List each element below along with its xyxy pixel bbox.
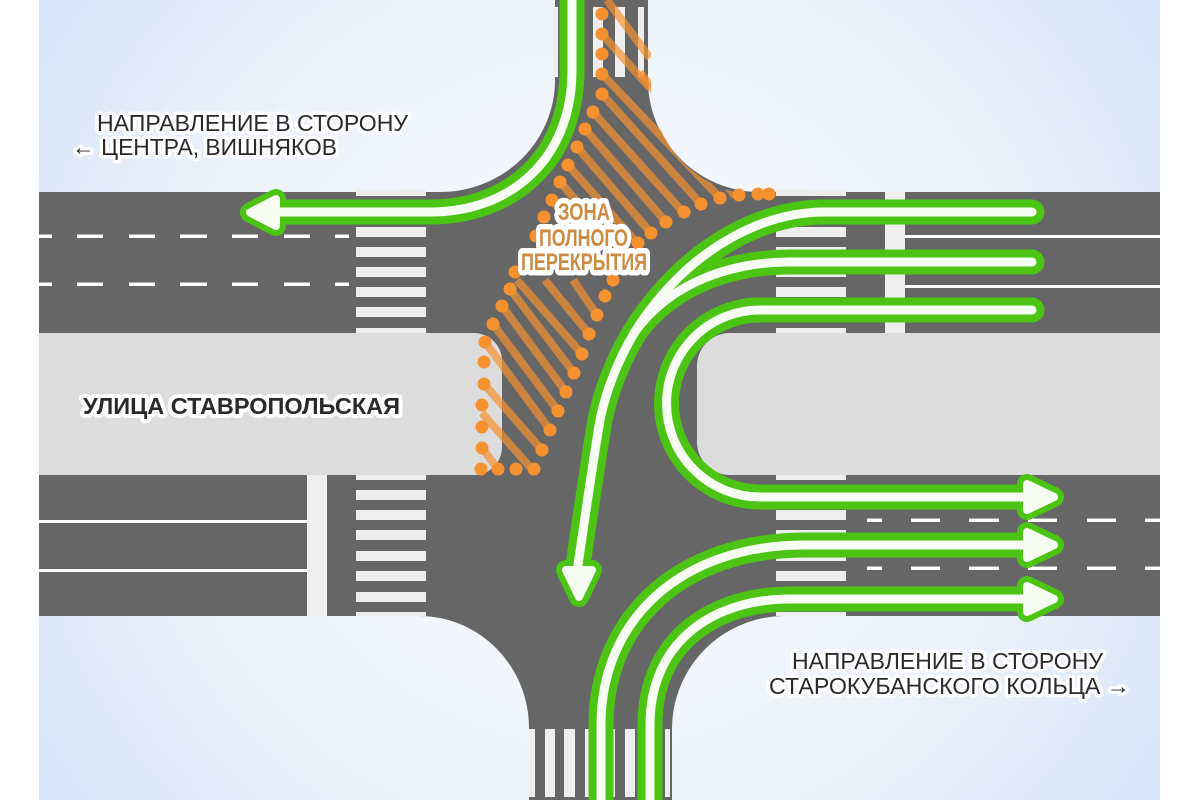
dashed lines: west bbox=[39, 234, 349, 286]
crosswalk: south bbox=[529, 729, 670, 797]
traffic routes bbox=[250, 0, 1054, 800]
label: direction to Starokubanskoe ring: СТАРОКУБАНСКОГО КОЛЬЦА → bbox=[769, 673, 1130, 699]
label: direction to centre: НАПРАВЛЕНИЕ В СТОРОНУ bbox=[97, 110, 408, 136]
dashed lines: east bbox=[867, 518, 1160, 570]
label: direction to centre bbox=[72, 110, 408, 160]
route outlines bbox=[275, 0, 1032, 800]
lane lines bbox=[39, 235, 1160, 572]
crosswalk: east bottom bbox=[776, 475, 846, 616]
median: left bbox=[39, 333, 502, 475]
full closure zone: hatching and dotted border bbox=[474, 0, 776, 476]
hatching: upper section bbox=[552, 0, 735, 245]
crosswalk: east top bbox=[776, 190, 846, 333]
crosswalk: west top bbox=[356, 190, 426, 333]
label: direction to centre: ← ЦЕНТРА, ВИШНЯКОВ bbox=[72, 134, 337, 160]
crosswalk: north bbox=[553, 7, 644, 77]
label: direction to Starokubanskoe ring: НАПРАВЛЕНИЕ В СТОРОНУ bbox=[792, 648, 1103, 674]
stop lines bbox=[307, 192, 905, 616]
label: full closure zone: ПЕРЕКРЫТИЯ bbox=[521, 249, 647, 276]
route centre lines bbox=[275, 0, 1032, 800]
arrow heads outlines bbox=[250, 199, 1054, 612]
label: full closure zone: ПОЛНОГО bbox=[539, 225, 628, 252]
hatching: lower section bbox=[482, 280, 597, 469]
label: full closure zone: ЗОНА bbox=[558, 199, 610, 226]
median: right bbox=[697, 333, 1160, 475]
label: direction to Starokubanskoe ring bbox=[769, 648, 1130, 699]
crosswalk: west bottom bbox=[356, 475, 426, 616]
arrow heads fill bbox=[250, 199, 1054, 612]
label: street name: УЛИЦА СТАВРОПОЛЬСКАЯ bbox=[83, 393, 400, 419]
dotted border bbox=[474, 8, 776, 476]
label: full closure zone bbox=[521, 199, 647, 276]
median: left rounded corner mask bbox=[474, 333, 502, 475]
